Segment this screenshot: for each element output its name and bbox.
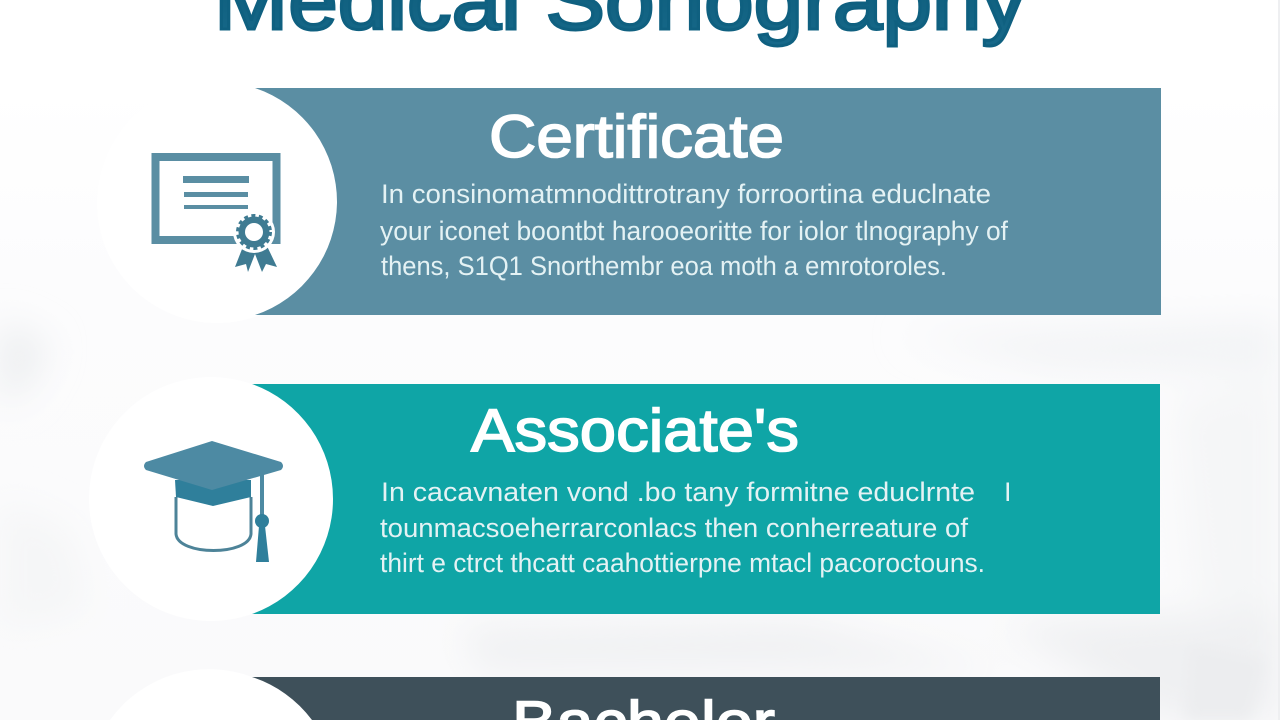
icon: graduation cap (144, 441, 283, 562)
text block: certificate description: thens, S1Q1 Snorthembr eoa moth a emrotoroles. (381, 251, 947, 281)
icon circle: certificate (97, 83, 337, 323)
text block: certificate description: In consinomatmnodittrotrany forroortina educlnate (381, 179, 991, 209)
panel: bachelor (252, 677, 1160, 720)
banner: associate's (252, 384, 1160, 614)
text block: certificate description: your iconet boontbt harooeoritte for iolor tlnography of (380, 216, 1008, 246)
icon: certificate with seal (156, 157, 277, 272)
icon circle: bachelor (110, 669, 312, 720)
panel: associate's (89, 377, 1160, 621)
text block: associate's description: tounmacsoeherrarconlacs then conherreature of (380, 513, 968, 543)
text block: associate's description: In cacavnaten vond .bo tany formitne educlrnte (381, 477, 975, 507)
heading: certificate: Certificate (489, 103, 784, 170)
text block: certificate description (380, 179, 1008, 281)
panel: certificate (97, 83, 1161, 323)
banner: certificate (255, 88, 1161, 315)
banner: bachelor (252, 677, 1160, 720)
heading: associate's: Associate's (471, 397, 799, 464)
text block: associate's description (380, 477, 1012, 578)
text block: associate's description: I (1004, 477, 1012, 507)
icon circle: associate's (89, 377, 333, 621)
text block: associate's description: thirt e ctrct thcatt caahottierpne mtacl pacoroctouns. (380, 548, 985, 578)
